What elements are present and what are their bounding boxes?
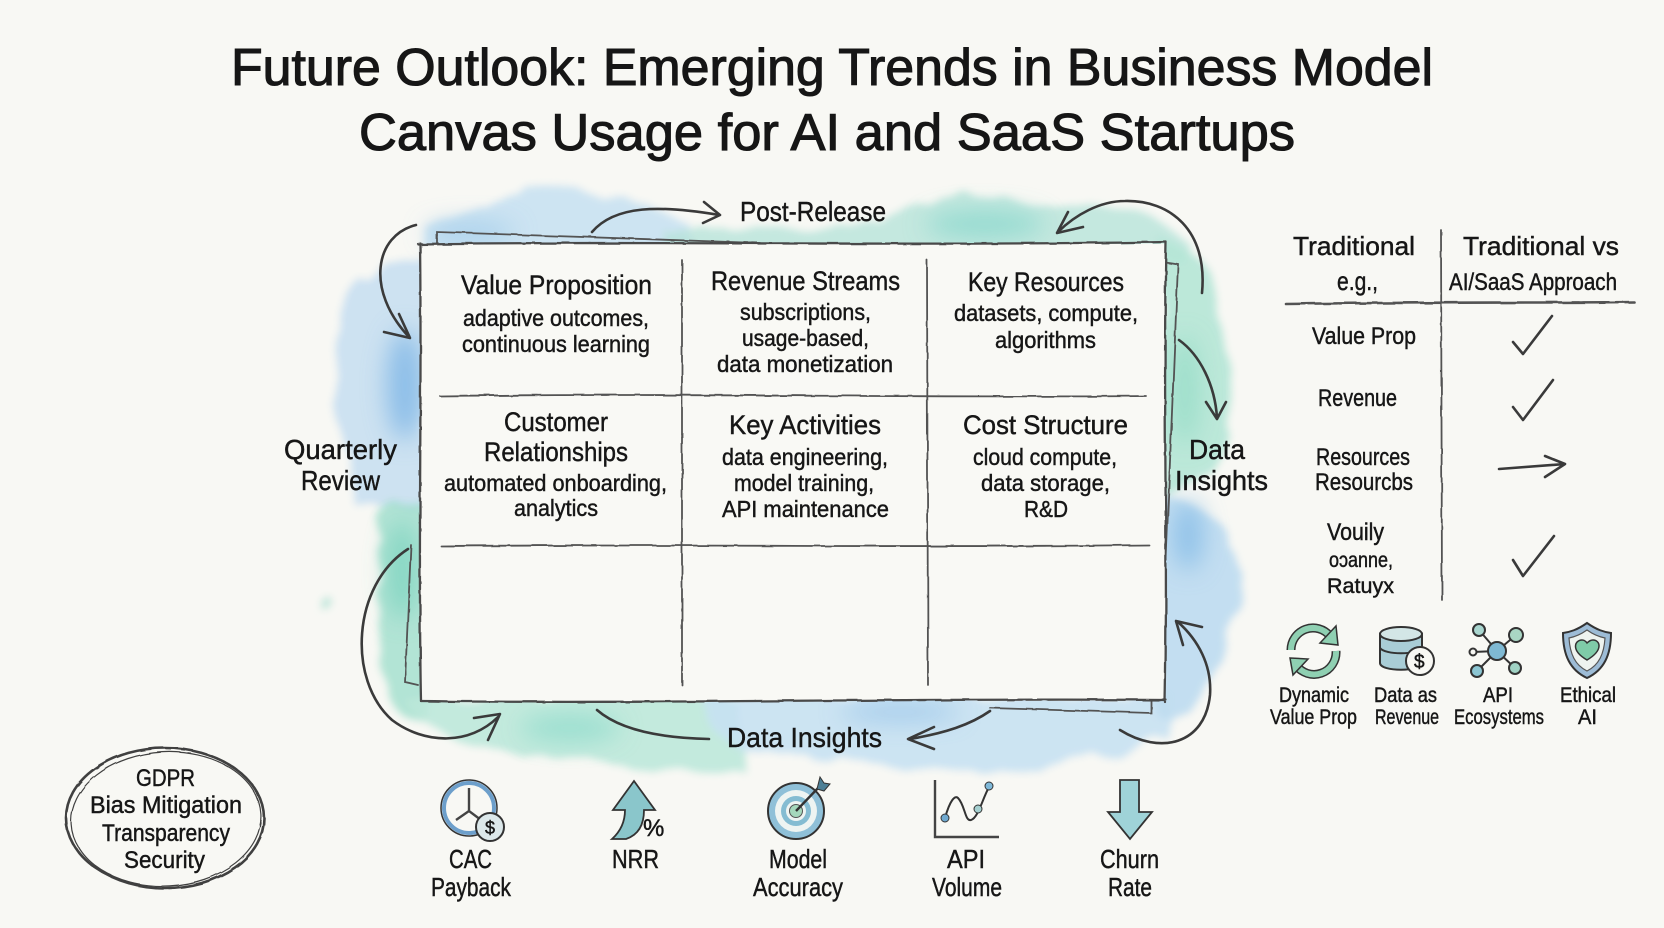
callout: compliance ellipse: Security (124, 847, 205, 874)
canvas sheet (405, 232, 1178, 713)
row: vouily: Ratuyx (1327, 575, 1395, 598)
cell: value proposition: continuous learning (462, 331, 650, 357)
icon: network (1470, 624, 1523, 677)
label: data insights bottom: Data Insights (727, 722, 882, 753)
arrow: right down (1179, 340, 1226, 419)
metric: model accuracy (753, 777, 843, 902)
row: vouily: Vouily (1327, 519, 1384, 546)
icon: clock with coin: $ (485, 818, 495, 838)
cell: revenue streams: data monetization (717, 351, 893, 377)
arrow: top right (1057, 201, 1203, 293)
cell: key resources (954, 267, 1138, 353)
table header: AI/SaaS Approach (1449, 269, 1617, 296)
icon group: api ecosystems: API (1483, 684, 1513, 707)
cell: cost structure (963, 410, 1128, 522)
title (231, 39, 1433, 162)
callout: compliance ellipse: Transparency (102, 820, 230, 847)
icon: up arrow with percent: % (643, 815, 664, 842)
cell: value proposition: Value Proposition (461, 270, 652, 300)
cell: cost structure: Cost Structure (963, 410, 1128, 440)
cell: key resources: algorithms (995, 327, 1096, 353)
label: data insights right: Insights (1175, 465, 1268, 496)
metric: cac payback: CAC (449, 844, 492, 874)
icon group: ethical ai: Ethical (1560, 684, 1616, 707)
panel: business model canvas (405, 232, 1178, 713)
metric: churn rate (1100, 780, 1159, 902)
cell: key activities: model training, (734, 470, 874, 496)
cell: value proposition (461, 270, 652, 357)
cell: key resources: datasets, compute, (954, 300, 1138, 326)
icon group: ethical ai (1560, 623, 1616, 729)
cell: value proposition: adaptive outcomes, (463, 305, 649, 331)
row: revenue (1318, 380, 1553, 420)
row: resources: Resources (1316, 444, 1410, 471)
arrow: top to post-release (592, 202, 720, 232)
metric: api volume: Volume (932, 872, 1002, 902)
comparison table (1286, 230, 1634, 600)
row: revenue: Revenue (1318, 385, 1397, 412)
cell: revenue streams: usage-based, (742, 325, 869, 351)
watercolor wash behind canvas (319, 183, 1242, 772)
icon group: dynamic value prop: Value Prop (1270, 706, 1357, 729)
row: resources: Resourcbs (1315, 469, 1413, 496)
icon group: data as revenue (1374, 627, 1439, 729)
cell: customer relationships: Relationships (484, 437, 628, 467)
icon: down arrow (1108, 780, 1152, 839)
cell: key activities: API maintenance (722, 496, 889, 522)
icon group: api ecosystems (1454, 624, 1544, 729)
icon group: api ecosystems: Ecosystems (1454, 706, 1544, 729)
label: data insights right: Data (1189, 434, 1245, 465)
metric: nrr (612, 781, 664, 874)
cell: customer relationships: automated onboarding, (444, 470, 667, 496)
metric: churn rate: Rate (1108, 872, 1152, 902)
metric: cac payback: Payback (431, 872, 512, 902)
icon group: data as revenue: Revenue (1375, 706, 1439, 729)
row: value prop (1312, 316, 1552, 354)
metric: model accuracy: Model (769, 844, 827, 874)
cell: cost structure: R&D (1024, 496, 1068, 522)
arrow: left bottom (362, 549, 500, 740)
table header (1293, 231, 1619, 296)
label: quarterly review (284, 434, 397, 496)
cell: cost structure: cloud compute, (973, 444, 1117, 470)
arrow: bottom left stroke (597, 710, 709, 739)
arrow: right bottom (1120, 621, 1210, 743)
table header: e.g., (1337, 266, 1378, 296)
metric: churn rate: Churn (1100, 844, 1159, 874)
cell: revenue streams: Revenue Streams (711, 266, 900, 296)
arrow: bottom right (908, 711, 990, 749)
label: quarterly review: Review (301, 465, 381, 496)
icon: line chart (935, 780, 999, 837)
label: data insights right (1175, 434, 1268, 496)
cell: key activities (722, 410, 889, 522)
callout: compliance ellipse (66, 747, 264, 891)
arrow: left top (380, 225, 416, 338)
cell: customer relationships: Customer (504, 407, 608, 437)
metric: cac payback (431, 780, 512, 902)
cell: key activities: Key Activities (729, 410, 881, 440)
icon group: dynamic value prop (1270, 626, 1357, 729)
cell: revenue streams: subscriptions, (740, 299, 871, 325)
icon: target (768, 777, 830, 839)
row: value prop: Value Prop (1312, 323, 1416, 350)
label: quarterly review: Quarterly (284, 434, 397, 465)
cell: customer relationships (444, 407, 667, 521)
icon: shield with heart (1563, 623, 1611, 678)
callout: compliance ellipse: Bias Mitigation (90, 792, 242, 819)
cell: cost structure: data storage, (981, 470, 1110, 496)
title: Canvas Usage for AI and SaaS Startups (359, 104, 1295, 162)
cell: key activities: data engineering, (722, 444, 888, 470)
table header: Traditional (1293, 231, 1415, 261)
table grid (1286, 230, 1634, 600)
callout: compliance ellipse: GDPR (136, 765, 195, 792)
title: Future Outlook: Emerging Trends in Business Model (231, 39, 1433, 97)
icon group: ethical ai: AI (1578, 706, 1597, 729)
cell: revenue streams (711, 266, 900, 377)
metric: api volume: API (947, 844, 985, 874)
metric: api volume (932, 780, 1002, 902)
table header: Traditional vs (1463, 231, 1619, 261)
cell: key resources: Key Resources (968, 267, 1124, 297)
row: vouily: oɔanne, (1329, 549, 1393, 572)
metric: model accuracy: Accuracy (753, 872, 843, 902)
row: vouily (1327, 519, 1554, 598)
icon group: dynamic value prop: Dynamic (1279, 684, 1349, 707)
icon group: data as revenue: Data as (1374, 684, 1437, 707)
icon: cycle (1290, 626, 1338, 675)
cell: customer relationships: analytics (514, 495, 598, 521)
label: post-release: Post-Release (740, 196, 886, 227)
row: resources (1315, 444, 1565, 496)
icon: database with coin: $ (1414, 652, 1425, 673)
metric: nrr: NRR (612, 844, 659, 874)
